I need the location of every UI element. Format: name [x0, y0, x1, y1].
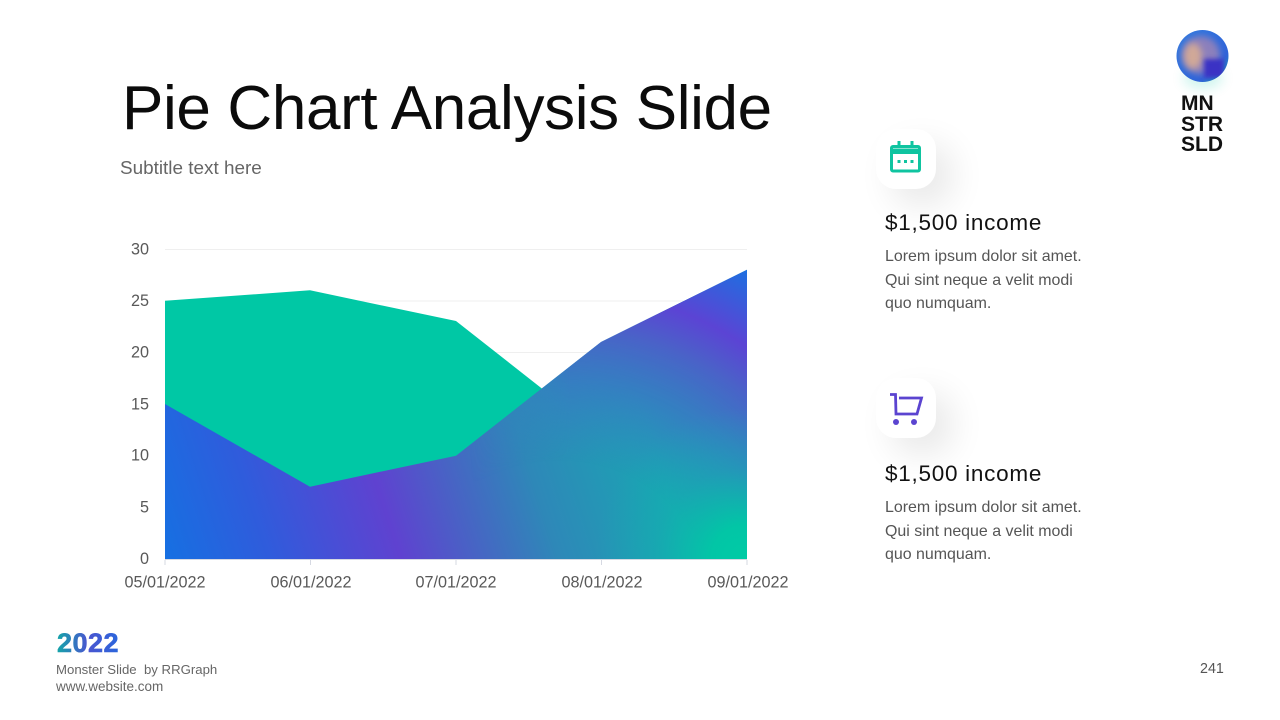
y axis labels: 25 [131, 292, 149, 310]
text block: income 2: Lorem ipsum dolor sit amet. [885, 499, 1082, 516]
x axis labels: 05/01/2022 [124, 574, 206, 592]
footer credit: www.website.com [56, 679, 163, 694]
text block: income 1: Qui sint neque a velit modi [885, 272, 1073, 289]
icon tile: shopping cart [876, 378, 936, 438]
text block: income 1: Lorem ipsum dolor sit amet. [885, 248, 1082, 265]
icon tile: calendar [876, 129, 936, 189]
y axis labels: 5 [140, 498, 149, 516]
title: Pie Chart Analysis Slide [122, 74, 772, 143]
y axis labels: 30 [131, 240, 149, 258]
x axis labels: 09/01/2022 [707, 574, 789, 592]
text block: income 2: Qui sint neque a velit modi [885, 523, 1073, 540]
logo text [1181, 92, 1223, 156]
subtitle: Subtitle text here [120, 158, 262, 179]
logo text: MN [1181, 92, 1214, 115]
year gradient text: 2022 [57, 628, 119, 658]
text block: income 2 [885, 499, 1082, 563]
y axis labels: 10 [131, 446, 149, 464]
y axis labels: 0 [140, 550, 149, 568]
y axis labels [131, 240, 149, 568]
x axis labels: 07/01/2022 [415, 574, 497, 592]
footer credit [56, 662, 217, 694]
text block: income 1 [885, 248, 1082, 312]
heading: income 1: $1,500 income [885, 210, 1042, 235]
x axis labels: 06/01/2022 [270, 574, 352, 592]
text block: income 2: quo numquam. [885, 546, 991, 563]
page number: 241 [1200, 661, 1224, 677]
logo text: SLD [1181, 133, 1223, 156]
series: green area [165, 290, 747, 559]
y axis labels: 20 [131, 344, 149, 362]
area chart [58, 30, 1228, 652]
y axis labels: 15 [131, 396, 149, 414]
logo text: STR [1181, 112, 1223, 136]
x axis labels: 08/01/2022 [561, 574, 643, 592]
logo sphere [1176, 30, 1228, 89]
footer credit: Monster Slide by RRGraph [56, 662, 217, 677]
heading: income 2: $1,500 income [885, 461, 1042, 486]
text block: income 1: quo numquam. [885, 295, 991, 312]
x axis labels [124, 574, 789, 592]
series: gradient area [165, 260, 747, 560]
